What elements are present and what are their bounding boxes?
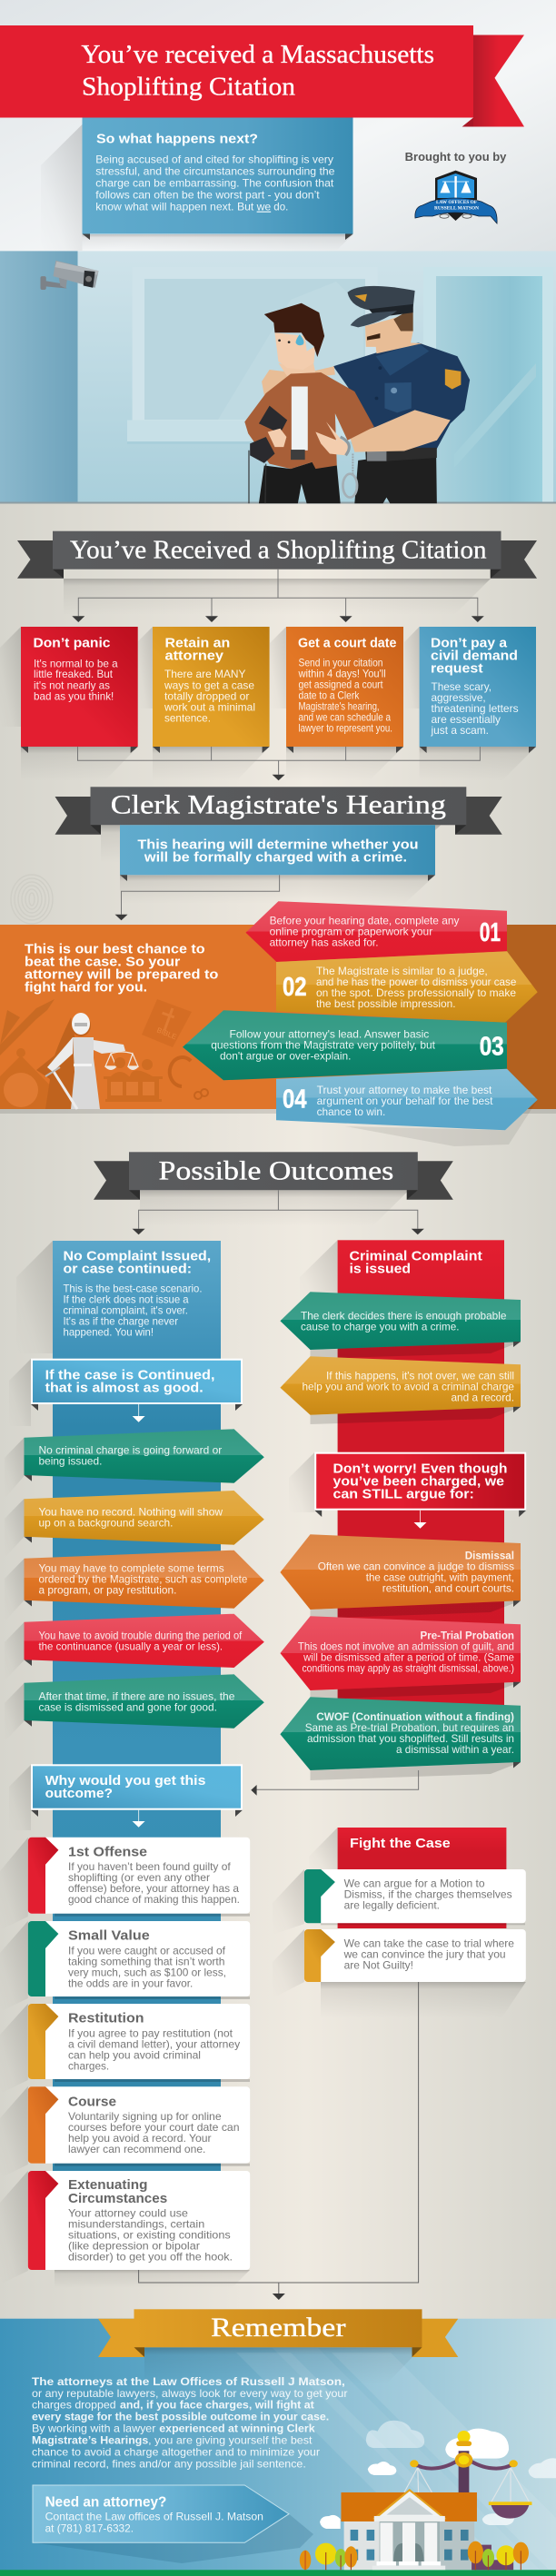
trees [300, 2541, 529, 2570]
arrow: don't worry down [414, 1511, 427, 1529]
connector: hearing to chances [114, 875, 280, 920]
step 01 arrow [245, 901, 507, 962]
text: lawyer can recommend one. [68, 2143, 205, 2155]
text: If you agree to pay restitution (not [68, 2026, 233, 2039]
text: it's not nearly as [34, 679, 110, 691]
footer illustration: clouds, courthouse, scales, trees [300, 2421, 556, 2570]
heading: is issued [349, 1261, 411, 1276]
text: threatening letters [431, 702, 519, 715]
step text: and he has the power to dismiss your case [316, 976, 517, 988]
text: If the clerk does not issue a [64, 1293, 189, 1305]
text [298, 1630, 514, 1675]
text: can STILL argue for: [333, 1487, 474, 1502]
connector: steps to hearing [78, 747, 480, 780]
text: situations, or existing conditions [68, 2229, 231, 2242]
text: Dismissal [465, 1550, 514, 1562]
text [45, 1367, 214, 1395]
card: get a court date [270, 627, 403, 781]
logo: law offices shield: RUSSELL MATSON [434, 205, 479, 211]
banner: clerk magistrate's hearing [55, 787, 502, 863]
text: the odds are in your favor. [68, 1977, 193, 1990]
text: being issued. [38, 1455, 102, 1468]
text: This hearing will determine whether you [137, 837, 419, 852]
text [333, 1461, 507, 1502]
text [302, 1369, 514, 1403]
text [318, 1550, 514, 1595]
text [68, 2207, 233, 2264]
heading: attorney [165, 649, 224, 664]
text [25, 941, 218, 995]
number 03: 03 [480, 1032, 504, 1061]
step text: on the spot. Dress professionally to make [316, 986, 516, 999]
logo: law offices shield: LAW OFFICES OF [436, 200, 478, 205]
text [34, 657, 118, 702]
callout: need an attorney [33, 2485, 313, 2563]
text: get assigned a court [298, 678, 383, 690]
card: small value [0, 1921, 250, 2012]
text: will be formally charged with a crime. [144, 849, 407, 865]
connector: to remember [139, 1982, 419, 2300]
text: ways to get a case [164, 679, 254, 691]
heading: Course [68, 2094, 116, 2109]
text [301, 1310, 507, 1333]
text: bad as you think! [34, 689, 114, 702]
text: It's normal to be a [34, 657, 118, 669]
heading [431, 636, 518, 677]
text block: attorneys summary: chance to avoid a charge altogether and to minimize your [32, 2446, 320, 2459]
text: Pre-Trial Probation [420, 1630, 514, 1642]
heading: Retain an [165, 636, 230, 651]
text block: attorneys summary [32, 2375, 348, 2471]
text: offense) before, your attorney has a [68, 1882, 239, 1895]
text: CWOF (Continuation without a finding) [316, 1710, 514, 1723]
text: good chance of making this happen. [68, 1893, 240, 1906]
text block: attorneys summary: Magistrate’s Hearings [32, 2434, 149, 2447]
icon: fingerprint [11, 875, 53, 924]
text [343, 1937, 514, 1972]
text: You may have to complete some terms [38, 1562, 224, 1575]
heading: or case continued: [64, 1261, 192, 1276]
text: admission that you shoplifted. Still results in [307, 1732, 514, 1745]
footer background [0, 2319, 556, 2576]
card: take the case to trial [273, 1929, 526, 2018]
text: Don’t worry! Even though [333, 1461, 507, 1477]
card: restitution [0, 2004, 250, 2094]
step text: online program or paperwork your [270, 925, 432, 937]
step text: Before your hearing date, complete any [270, 914, 460, 926]
heading: Extenuating [68, 2177, 147, 2193]
text: very much, such as $100 or less, [68, 1967, 226, 1979]
text: shoplifting (or even any other [68, 1871, 210, 1884]
text: We can argue for a Motion to [344, 1877, 485, 1889]
text [38, 1562, 248, 1597]
text: Often we can convince a judge to dismiss [318, 1560, 514, 1573]
text: You have no record. Nothing will show [38, 1506, 223, 1519]
text: within 4 days! You'll [298, 667, 386, 679]
text: just a scam. [431, 724, 489, 737]
text: This does not involve an admission of guilt, and [298, 1640, 514, 1653]
text: ordered by the Magistrate, such as complete [38, 1573, 248, 1586]
text: are legally deficient. [344, 1898, 440, 1911]
heading: civil demand [431, 649, 518, 664]
heading [64, 1248, 211, 1276]
arrow: dismissed for good [5, 1674, 264, 1741]
text: beat the case. So your [25, 954, 180, 969]
text: Magistrate's hearing, [298, 699, 380, 712]
brought to you by: Brought to you by [405, 151, 506, 163]
heading: No Complaint Issued, [64, 1248, 211, 1263]
title ribbon [0, 25, 524, 127]
arrow: cwof [280, 1697, 521, 1780]
text: are essentially [431, 713, 501, 726]
text [431, 680, 519, 737]
text: It's as if the charge never [64, 1314, 178, 1327]
step 02 arrow [276, 951, 538, 1023]
number 04: 04 [283, 1085, 307, 1114]
text: a program, or pay restitution. [38, 1584, 176, 1597]
banner: you've received a shoplifting citation [17, 531, 537, 615]
text block: attorneys summary: By working with a lawyer [32, 2422, 155, 2435]
text: courses before your court date can [68, 2121, 240, 2134]
step text [211, 1028, 436, 1063]
arrow: no criminal charge [5, 1429, 264, 1499]
heading: 1st Offense [68, 1844, 147, 1859]
text: you’ve been charged, we [333, 1474, 504, 1490]
text: we can convince the jury that you [343, 1948, 506, 1961]
arrow: why down [133, 1810, 145, 1828]
panel: best chance band [0, 925, 556, 1114]
heading: Don’t panic [33, 636, 111, 651]
text: We can take the case to trial where [344, 1937, 514, 1950]
text: date to a Clerk [298, 689, 360, 701]
text: Send in your citation [298, 656, 383, 669]
text block: attorneys summary: The attorneys at the Law Offices of Russell J Matson, [32, 2375, 345, 2388]
text block: attorneys summary: experienced at winning Clerk [159, 2422, 315, 2435]
text: The clerk decides there is enough probable [301, 1310, 507, 1323]
text block: attorneys summary: criminal record, fines and/or any possible jail sentence. [32, 2458, 306, 2471]
text: outcome? [45, 1786, 113, 1801]
box: why would you get this outcome [9, 1765, 243, 1830]
text [68, 2026, 240, 2072]
text: and a record. [451, 1391, 514, 1403]
clouds [320, 2421, 556, 2529]
illustration: lady justice and courtroom: BIBLE [155, 1026, 178, 1041]
text block: attorneys summary: every stage for the best possible outcome in your case. [32, 2411, 329, 2423]
text: will be dismissed after a period of time. (Same [303, 1651, 514, 1664]
heading: Circumstances [68, 2191, 167, 2206]
title text: Shoplifting Citation [82, 73, 295, 102]
banner: possible outcomes [94, 1152, 453, 1226]
step 03 arrow [183, 1010, 507, 1080]
text: Your attorney could use [68, 2207, 188, 2220]
number 01: 01 [480, 918, 501, 947]
heading text: You’ve Received a Shoplifting Citation [70, 536, 487, 565]
text: little freaked. But [34, 668, 114, 680]
panel: hearing explanation [120, 825, 435, 904]
text [38, 1444, 222, 1468]
heading: Criminal Complaint [349, 1248, 482, 1263]
body text: charge can be embarrassing. The confusion that [95, 177, 334, 190]
heading text: Possible Outcomes [158, 1155, 393, 1185]
panel: no complaint column [16, 1241, 221, 2171]
text: fight hard for you. [25, 979, 147, 995]
text: cause to charge you with a crime. [301, 1321, 460, 1333]
body text: know what will happen next. But [95, 201, 254, 213]
heading: Fight the Case [350, 1836, 451, 1851]
card: don't panic [0, 627, 138, 781]
logo: law offices shield [415, 171, 497, 223]
body text: Being accused of and cited for shoplifting is very [95, 153, 333, 165]
arrow: no record [5, 1491, 264, 1558]
text: that is almost as good. [45, 1380, 204, 1395]
contact text [45, 2510, 263, 2534]
text [68, 1860, 240, 1906]
contact text: Contact the Law offices of Russell J. Matson [45, 2510, 263, 2522]
box: don't worry [289, 1452, 526, 1517]
text [64, 1282, 202, 1338]
text block: attorneys summary: and, if you face charges, will fight at [120, 2399, 314, 2412]
text: lawyer to represent you. [298, 721, 392, 734]
shoplifter [244, 303, 374, 503]
text: misunderstandings, certain [68, 2218, 204, 2231]
text: charges. [68, 2059, 109, 2072]
text block: attorneys summary: , you are giving yourself the best [148, 2434, 313, 2447]
step text: questions from the Magistrate very politely, but [211, 1039, 436, 1052]
text: (like depression or bipolar [68, 2240, 200, 2253]
text: taking something that isn’t worth [68, 1956, 225, 1968]
scene: store backdrop [0, 251, 556, 503]
connector: cwof to why [251, 1770, 419, 1796]
text: sentence. [164, 711, 211, 724]
heading [68, 2177, 167, 2206]
card: don't pay a civil demand request [404, 627, 536, 781]
text: up on a background search. [38, 1517, 173, 1530]
text: Voluntarily signing up for online [68, 2110, 222, 2123]
text [68, 1945, 226, 1990]
text: Same as Pre-trial Probation, but requires an [305, 1721, 514, 1734]
text: criminal complaint, it's over. [64, 1303, 188, 1316]
scales of justice [404, 2431, 531, 2519]
text: These scary, [431, 680, 491, 693]
text: After that time, if there are no issues, the [38, 1689, 235, 1702]
heading: Need an attorney? [45, 2494, 166, 2510]
step text: attorney has asked for. [270, 936, 378, 948]
text: case is dismissed and gone for good. [38, 1700, 217, 1713]
text [137, 837, 419, 865]
body text: do. [273, 201, 288, 213]
card: retain an attorney [138, 627, 270, 781]
arrow: avoid trouble [5, 1614, 264, 1680]
text [38, 1630, 243, 1653]
panel: criminal complaint column [300, 1240, 504, 1712]
text: disorder) to get you off the hook. [68, 2251, 233, 2264]
text: This is our best chance to [25, 941, 205, 956]
arrow: continued down [133, 1404, 145, 1422]
courthouse [341, 2489, 513, 2570]
header background [0, 0, 556, 252]
text: totally dropped or [164, 689, 249, 702]
text: help you and work to avoid a criminal charge [302, 1380, 514, 1392]
body text [95, 153, 335, 213]
panel: so what happens next [41, 118, 352, 251]
panel: fight the case [309, 1828, 506, 1928]
contact text: at (781) 817-6332. [45, 2522, 134, 2534]
text: the case outright, with payment, [366, 1571, 514, 1584]
text [45, 1773, 205, 1801]
heading: Get a court date [298, 636, 396, 651]
text: and we can schedule a [298, 710, 391, 723]
body text: stressful, and the circumstances surrounding the [95, 165, 335, 178]
text [298, 656, 392, 734]
text [68, 2110, 240, 2155]
text: a civil demand letter), your attorney [68, 2037, 240, 2050]
text: the continuance (usually a year or less). [38, 1640, 223, 1653]
card: 1st offense [0, 1838, 250, 1930]
heading text: Remember [211, 2313, 346, 2343]
heading: request [431, 661, 483, 677]
step text [270, 914, 460, 948]
title text: You’ve received a Massachusetts [81, 40, 434, 69]
text: happened. You win! [64, 1325, 154, 1338]
arrow: pre-trial probation [280, 1616, 521, 1699]
step text: Follow your attorney's lead. Answer basic [229, 1028, 429, 1041]
text: This is the best-case scenario. [64, 1282, 202, 1294]
arrow: complete terms [5, 1551, 264, 1621]
step text: don't argue or over-explain. [220, 1050, 351, 1063]
step text [316, 965, 517, 1010]
heading: so what happens next: So what happens next? [96, 132, 258, 147]
card: course [0, 2086, 250, 2178]
illustration: officer arresting shoplifter [244, 286, 470, 503]
illustration: lady justice and courtroom [0, 999, 208, 1109]
icon: security camera [40, 261, 99, 290]
step text: chance to win. [317, 1105, 385, 1118]
step text [317, 1084, 493, 1118]
text [38, 1689, 235, 1713]
text: If the case is Continued, [45, 1367, 214, 1382]
text [305, 1710, 514, 1756]
heading: Small Value [68, 1928, 150, 1944]
title text [81, 40, 434, 102]
text: If this happens, it's not over, we can still [326, 1369, 514, 1382]
text: attorney will be prepared to [25, 966, 218, 982]
text [164, 668, 255, 724]
connector: outcomes split [133, 1190, 424, 1234]
text: can help you avoid criminal [68, 2048, 201, 2061]
banner: remember [98, 2309, 458, 2384]
body text: follows can often be the worst part - you don’t [95, 189, 320, 202]
connector: citation to four steps [72, 570, 484, 622]
heading [165, 636, 230, 664]
body text: we [256, 201, 272, 213]
text: restitution, and court courts. [382, 1582, 514, 1595]
text: aggressive, [431, 691, 486, 704]
text: You have to avoid trouble during the period of [38, 1630, 243, 1642]
box: if the case is continued [9, 1359, 243, 1426]
text: are Not Guilty! [344, 1959, 413, 1972]
step 04 arrow [276, 1069, 538, 1146]
heading: Don’t pay a [431, 636, 508, 651]
text: If you were caught or accused of [68, 1945, 226, 1957]
officer [262, 286, 470, 503]
text block: attorneys summary: charges dropped [32, 2399, 116, 2412]
step text: the best possible impression. [316, 997, 456, 1010]
text: If you haven’t been found guilty of [68, 1860, 231, 1873]
text: help you avoid a record. Your [68, 2132, 212, 2145]
text: Dismiss, if the charges themselves [344, 1887, 512, 1900]
heading text: Clerk Magistrate's Hearing [111, 790, 446, 820]
text: Why would you get this [45, 1773, 205, 1788]
heading [349, 1248, 482, 1276]
text: No criminal charge is going forward or [38, 1444, 222, 1457]
heading: Restitution [68, 2010, 144, 2026]
text block: attorneys summary: or any reputable lawyers, always look for every way to get your [32, 2387, 348, 2400]
step text: argument on your behalf for the best [317, 1095, 493, 1107]
callout: it's not over arrow [280, 1356, 521, 1424]
card: extenuating circumstances [0, 2171, 250, 2288]
text: There are MANY [164, 668, 245, 680]
card: motion to dismiss [273, 1869, 526, 1935]
number 02: 02 [283, 973, 307, 1002]
step text: The Magistrate is similar to a judge, [316, 965, 488, 977]
text [344, 1877, 512, 1911]
callout: clerk decides arrow [280, 1292, 521, 1359]
text [38, 1506, 223, 1530]
text: a dismissal within a year. [396, 1743, 514, 1756]
step text: Trust your attorney to make the best [317, 1084, 492, 1096]
text: work out a minimal [164, 700, 255, 713]
text: conditions may apply as straight dismissal, above.) [302, 1662, 514, 1675]
arrow: dismissal [280, 1534, 521, 1619]
